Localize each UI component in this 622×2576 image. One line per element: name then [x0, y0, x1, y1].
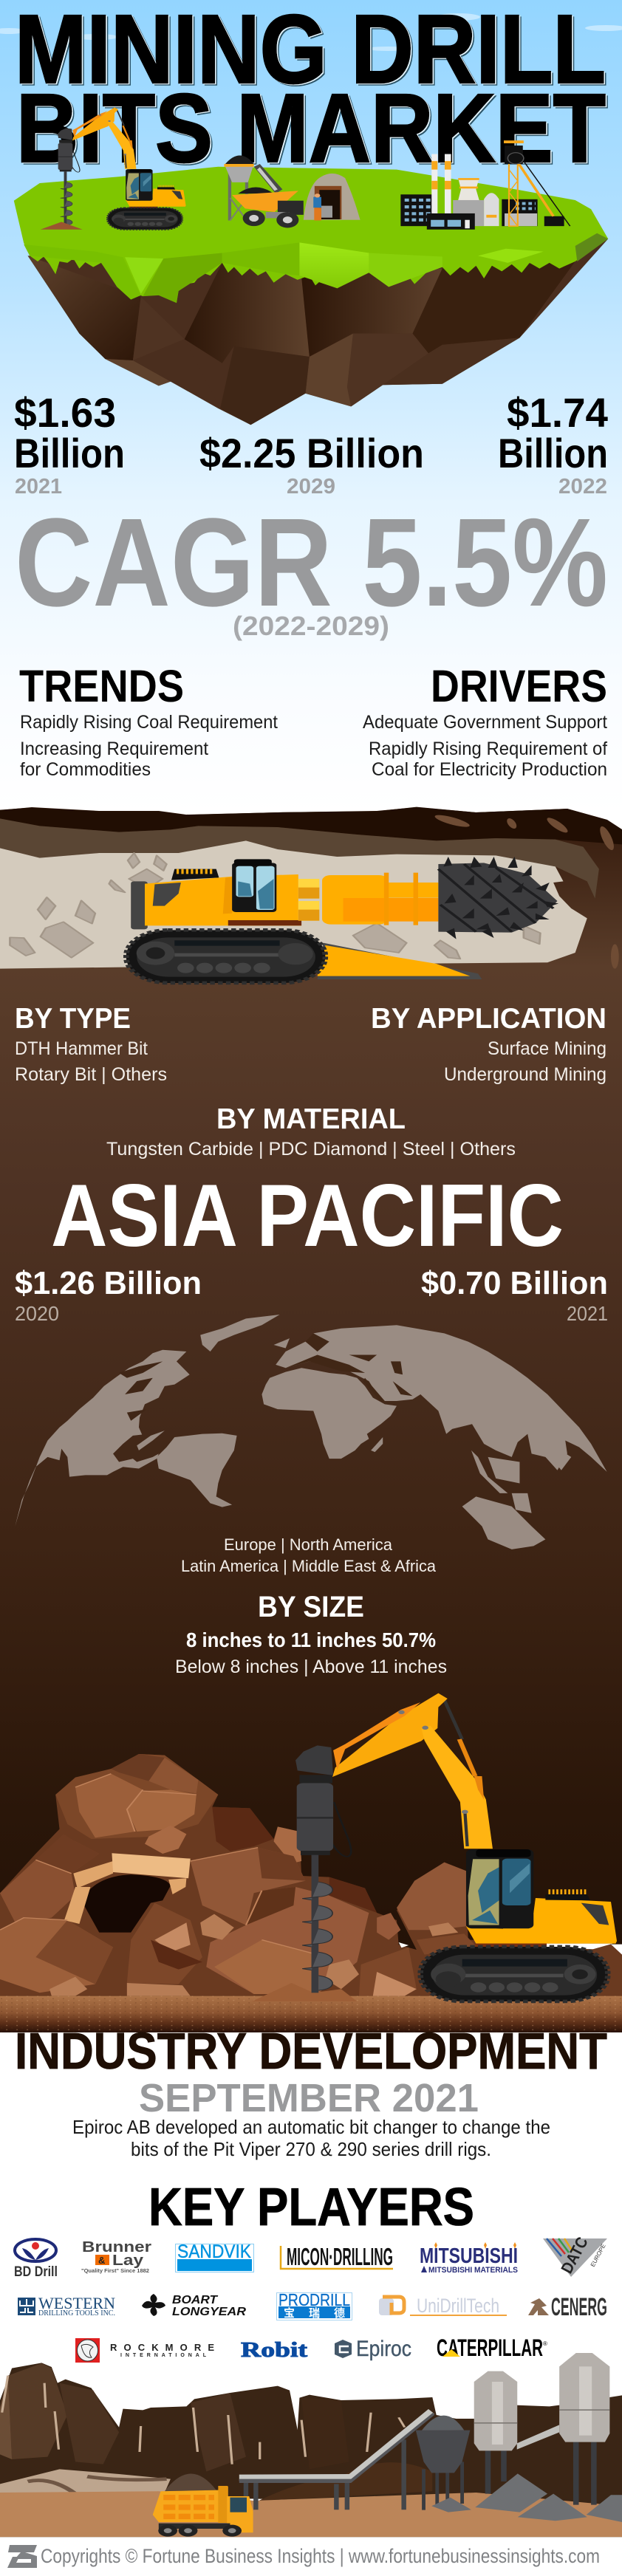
silos — [474, 2353, 609, 2505]
logo: Western Drilling Tools — [18, 2294, 115, 2318]
panel: by application — [371, 1003, 606, 1085]
logo: Micon Drilling: MICON·DRILLING — [287, 2243, 393, 2270]
panel: by application: BY APPLICATION — [371, 1003, 606, 1035]
stat: 2021 market size: 2021 — [15, 475, 62, 499]
illustration: floating island with mining scene — [14, 107, 608, 425]
heading: Asia Pacific: ASIA PACIFIC — [51, 1166, 564, 1265]
logo: Epiroc: Epiroc — [356, 2337, 411, 2361]
logo: DATC: EUROPE — [589, 2243, 607, 2268]
logo: RockMore: ROCKMORE — [110, 2342, 214, 2353]
stat: 2022 market size — [498, 389, 608, 499]
cave rocks — [10, 853, 540, 959]
date: September 2021: SEPTEMBER 2021 — [139, 2076, 479, 2120]
logo: Brunner and Lay: "Quality First" Since 1882 — [81, 2269, 149, 2274]
text: trends list: Rapidly Rising Coal Requirement — [20, 712, 278, 733]
icon: drill excavator — [295, 1693, 617, 2001]
hopper — [416, 2416, 471, 2512]
panel: by type: DTH Hammer Bit — [15, 1038, 148, 1059]
conveyor belt — [239, 2409, 434, 2510]
icon: Fortune Business Insights logo — [7, 2545, 37, 2568]
logo: Caterpillar — [437, 2334, 547, 2361]
panel: by type: Rotary Bit | Others — [15, 1064, 167, 1085]
stat: Asia Pacific 2020: $1.26 Billion — [15, 1265, 202, 1301]
panel: by material — [106, 1103, 516, 1159]
panel: by size — [175, 1591, 447, 1677]
logo: UniDrillTech: UniDrillTech — [417, 2295, 499, 2317]
illustration: tunnel boring machine in cave — [0, 807, 622, 983]
logo: Boart Longyear: BOART — [172, 2294, 218, 2306]
tunnel layers — [0, 807, 622, 969]
panel: by size: Below 8 inches | Above 11 inches — [175, 1657, 447, 1677]
logo: BD Drill: BD Drill — [14, 2264, 58, 2280]
logo: Prodrill: 德 — [334, 2306, 345, 2320]
island rock underside — [28, 239, 608, 425]
chart: world map globe — [15, 1315, 607, 1549]
logo: Prodrill: 宝 — [284, 2306, 295, 2320]
logo: Caterpillar: ® — [543, 2340, 547, 2347]
logo: Sandvik: SANDVIK — [177, 2241, 251, 2262]
logo: Mitsubishi — [420, 2242, 518, 2275]
logo: Western Drilling Tools: DRILLING TOOLS INC. — [38, 2309, 115, 2318]
text: drivers list: Coal for Electricity Production — [372, 759, 607, 780]
logo: Brunner and Lay: Lay — [112, 2253, 144, 2269]
text: trends list — [20, 712, 278, 780]
icon: soil mound — [41, 222, 83, 230]
icon: dump truck with hopper — [224, 155, 304, 227]
text: drivers list — [363, 712, 607, 780]
machine: tunnel borer — [126, 857, 558, 983]
text: trends list: for Commodities — [20, 759, 151, 780]
panel: by material: BY MATERIAL — [216, 1103, 406, 1135]
illustration: rock mine and drill excavator — [0, 1693, 622, 2032]
text: other regions: Latin America | Middle East & Africa — [181, 1557, 437, 1575]
text: drivers list: Adequate Government Support — [363, 712, 607, 733]
logo: Boart Longyear — [142, 2294, 246, 2318]
stat: 2022 market size: $1.74 — [507, 389, 608, 436]
logo: Brunner and Lay: Brunner — [82, 2239, 151, 2255]
logo: Cenerg — [528, 2293, 607, 2321]
panel: by type — [15, 1003, 167, 1085]
stat: 2021 market size — [14, 389, 125, 499]
logo: Sandvik — [176, 2241, 254, 2272]
rock pile with cave — [0, 1754, 622, 1996]
island grass top — [14, 167, 608, 303]
logo: Micon Drilling — [281, 2243, 393, 2270]
icon: mine entrance with worker — [304, 174, 360, 221]
logo: DATC — [543, 2234, 607, 2277]
stat: Asia Pacific 2021: 2021 — [567, 1302, 608, 1325]
stat: Asia Pacific 2020: 2020 — [15, 1302, 59, 1325]
logo: RockMore — [75, 2338, 214, 2363]
text: development description: Epiroc AB developed an automatic bit changer to change the — [72, 2116, 550, 2138]
logo: Caterpillar: CATERPILLAR — [437, 2334, 543, 2361]
logo: Boart Longyear: LONGYEAR — [172, 2306, 246, 2318]
logo: Prodrill: 瑞 — [309, 2306, 320, 2320]
text: other regions: Europe | North America — [224, 1535, 393, 1554]
panel: by application: Surface Mining — [488, 1038, 606, 1059]
stat: 2022 market size: 2022 — [558, 475, 607, 499]
heading: key players: KEY PLAYERS — [148, 2178, 474, 2237]
background: sky — [0, 0, 622, 812]
clouds — [0, 13, 622, 51]
illustration: open-pit mine scene — [0, 2353, 622, 2537]
stat: Asia Pacific 2020 — [15, 1265, 202, 1325]
logo: Mitsubishi: MITSUBISHI MATERIALS — [428, 2266, 518, 2275]
panel: by size: 8 inches to 11 inches 50.7% — [186, 1628, 436, 1651]
footer: copyright — [0, 2537, 622, 2568]
icon: dump truck — [153, 2474, 253, 2537]
text: other regions — [181, 1535, 437, 1575]
panel: by application: Underground Mining — [444, 1064, 606, 1085]
stat: Asia Pacific 2021: $0.70 Billion — [421, 1265, 608, 1301]
panel: trends — [19, 661, 278, 780]
logo: Prodrill — [276, 2290, 352, 2320]
logo: Mitsubishi: MITSUBISHI — [420, 2244, 518, 2268]
stat: 2022 market size: Billion — [498, 430, 608, 476]
stat: 2021 market size: $1.63 — [14, 389, 116, 436]
logo: UniDrillTech — [379, 2295, 507, 2317]
logo: Western Drilling Tools: WESTERN — [38, 2294, 115, 2312]
text: trends list: Increasing Requirement — [20, 739, 208, 759]
icon: power plant and mine derrick — [400, 140, 570, 230]
text: drivers list: Rapidly Rising Requirement of — [369, 739, 607, 759]
mountains — [0, 2363, 622, 2506]
CAGR period: (2022-2029) — [233, 611, 389, 641]
panel: key player logos — [14, 2234, 607, 2363]
icon: drill excavator — [58, 107, 186, 230]
logo: RockMore: INTERNATIONAL — [120, 2353, 207, 2358]
gravel piles — [475, 2473, 622, 2522]
logo: Epiroc — [335, 2337, 411, 2361]
logo: BD Drill — [14, 2239, 58, 2280]
logo: Brunner and Lay: & — [98, 2255, 105, 2266]
logo: Robit: Robit — [241, 2338, 307, 2362]
stat: 2021 market size: Billion — [14, 430, 125, 476]
logo: DATC: DATC — [557, 2234, 592, 2276]
ground — [0, 2491, 622, 2537]
heading: trends: TRENDS — [19, 661, 184, 711]
stat: 2029 market size: $2.25 Billion — [199, 430, 424, 476]
text: development description — [72, 2116, 550, 2160]
stat: 2029 market size: 2029 — [287, 475, 335, 499]
panel: by size: BY SIZE — [258, 1591, 364, 1623]
panel: by material: Tungsten Carbide | PDC Diamond | Steel | Others — [106, 1139, 516, 1159]
ground — [0, 1983, 622, 2032]
text: development description: bits of the Pit Viper 270 & 290 series drill rigs. — [131, 2138, 491, 2160]
title — [15, 0, 606, 182]
stat: 2029 market size — [199, 430, 424, 499]
panel: earth background — [0, 807, 622, 2032]
panel: by type: BY TYPE — [15, 1003, 131, 1035]
logo: Brunner and Lay — [81, 2239, 151, 2274]
panel: drivers — [363, 661, 607, 780]
stat: Asia Pacific 2021 — [421, 1265, 608, 1325]
logo: Prodrill: PRODRILL — [278, 2290, 350, 2309]
